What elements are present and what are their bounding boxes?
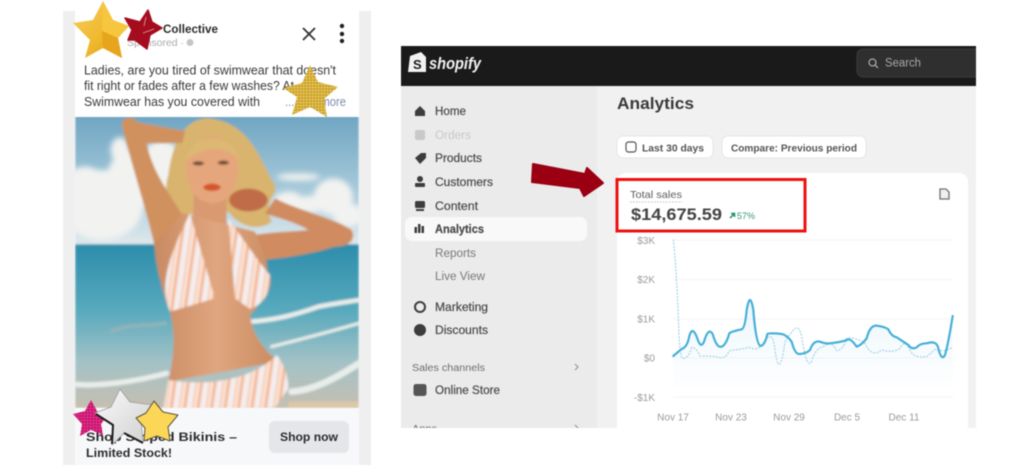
navigation labels: Reports [435,248,476,260]
ad headline: Shop Striped Bikinis – [86,430,237,444]
navigation labels: Online Store [435,385,500,397]
panel: Shopify analytics dashboard [401,46,992,443]
series lines [672,239,954,366]
navigation labels [412,106,500,435]
line chart [634,236,953,424]
icon: globe [186,39,194,46]
chevrons [575,364,578,431]
ad body copy: fit right or fades after a few washes? At [84,79,294,93]
filter: Last 30 days [618,137,712,157]
percent change: 57% [737,211,756,222]
ad body copy: ... See more [285,95,346,109]
navigation labels: Products [435,153,482,165]
ad headline: Limited Stock! [86,446,172,460]
navigation labels: Customers [435,177,493,189]
navigation labels: Home [435,106,466,118]
metric value: $14,675.59 [631,205,722,224]
button: Shop now [269,421,349,453]
callout: red highlight box [617,180,805,231]
icon: Shopify bag: S [413,57,422,72]
top bar [401,46,992,86]
y axis labels: -$1K [634,393,655,404]
navigation labels: Sales channels [412,363,485,374]
metric label: Total sales [630,189,682,201]
y axis labels [634,236,655,404]
x axis labels: Nov 23 [715,412,747,424]
icon: trend arrow [730,214,734,218]
navigation icons [414,106,426,396]
panel: total sales card [617,173,968,443]
x axis labels: Nov 17 [657,412,689,424]
x axis labels: Dec 11 [889,412,920,424]
panel: Facebook ad mockup [60,11,371,465]
ad body copy: Ladies, are you tired of swimwear that doesn't [84,64,336,78]
navigation labels: Marketing [435,302,488,314]
navigation labels: Analytics [435,224,484,236]
y axis labels: $0 [644,354,655,364]
search box: Search [885,58,921,70]
x axis labels: Dec 5 [834,412,860,424]
y axis labels: $3K [637,236,655,247]
button: Shop now: Shop now [280,430,338,444]
filter: Last 30 days: Last 30 days [642,144,704,154]
advertiser name: Collective [163,22,218,36]
sidebar [412,105,580,428]
filter: Compare previous period: Compare: Previous period [731,144,857,154]
ad body copy [84,64,346,109]
Shopify wordmark: shopify [429,54,482,73]
navigation labels: Orders [435,130,471,142]
ad headline [86,430,237,460]
icon: close [303,28,315,40]
sponsored label: Sponsored · [127,37,184,49]
icon: gold glitter star [283,65,338,117]
heading: Analytics: Analytics [617,95,694,113]
icon: silver star [95,389,153,445]
navigation labels: Content [435,201,479,213]
icon: Shopify bag [408,52,426,72]
icon: document export [940,189,949,199]
icon: yellow star [136,401,178,441]
x axis labels [657,413,920,421]
filter: Compare previous period [723,137,865,157]
arrow: pointing to total sales [532,164,603,196]
x axis labels: Nov 29 [773,412,805,424]
icon: red star [125,10,162,49]
search box [857,49,992,77]
icon: pink glitter star [73,400,108,436]
y axis labels: $1K [637,314,655,326]
navigation labels: Live View [435,271,486,283]
navigation labels: Discounts [435,325,488,337]
ad body copy: Swimwear has you covered with [84,95,260,109]
selected nav highlight [405,217,587,241]
y axis labels: $2K [637,275,655,286]
navigation labels: Apps [412,424,437,435]
ad photo: model on a beach [60,115,363,409]
icon: gold star [73,1,129,58]
icon: menu dots [340,24,344,43]
